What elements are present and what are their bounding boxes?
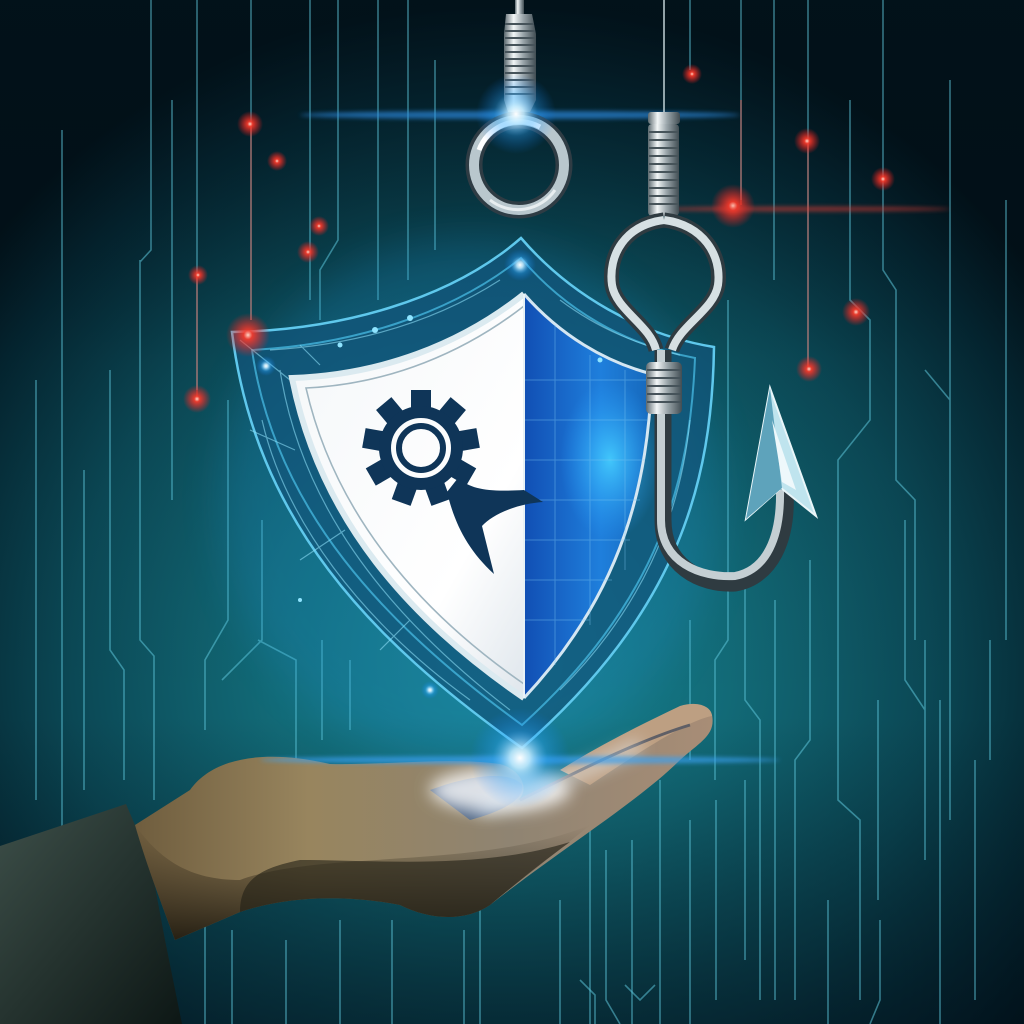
shield [220,238,720,760]
rim detail lines [240,280,690,710]
red lights [183,64,950,413]
palm glow burst [260,708,780,808]
shield glow [220,240,720,760]
top blue flare [300,111,740,119]
lower palm shadow [135,825,590,940]
hook one: round eye [474,0,564,210]
hook two: fish hook with arrow barb [611,0,816,583]
icon: gear with fish tail [362,390,543,574]
corner flare [226,313,270,357]
outer glass rim [232,238,714,748]
white half [292,294,524,698]
finger highlights [560,704,712,785]
shield sparkles [256,249,602,699]
palm light [430,768,570,812]
blue half [524,294,652,698]
hand [0,704,713,1024]
center split [523,294,525,698]
sleeve [0,804,182,1024]
palm and fingers [135,706,713,940]
blue grid [524,325,648,665]
